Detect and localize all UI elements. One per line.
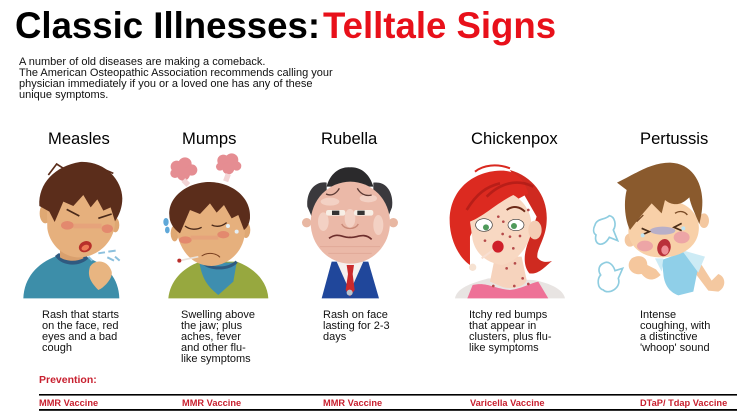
symptom text: mumps: Swelling above bbox=[181, 309, 255, 321]
title bbox=[15, 5, 556, 46]
symptom text: chickenpox: clusters, plus flu- bbox=[469, 331, 552, 343]
intro text block: The American Osteopathic Association recommends calling your bbox=[19, 67, 333, 79]
symptom text: rubella: days bbox=[323, 331, 347, 343]
vaccine labels: MMR Vaccine bbox=[39, 398, 98, 408]
symptom text: mumps: aches, fever bbox=[181, 331, 241, 343]
prevention label: Prevention: bbox=[39, 374, 97, 386]
icon: red-haired woman with spots bbox=[450, 165, 565, 298]
symptom text: mumps: and other flu- bbox=[181, 342, 246, 354]
heading: mumps: Mumps bbox=[182, 129, 236, 148]
heading: measles: Measles bbox=[48, 129, 110, 148]
icon: boy coughing with puffs bbox=[594, 163, 724, 295]
symptom text: measles: Rash that starts bbox=[42, 309, 120, 321]
symptom text: rubella: lasting for 2-3 bbox=[323, 320, 390, 332]
symptom text: pertussis: a distinctive bbox=[640, 331, 697, 343]
intro text block: A number of old diseases are making a comeback. bbox=[19, 56, 265, 68]
symptom text: mumps bbox=[181, 309, 255, 365]
icon: feverish boy with thermometer bbox=[163, 153, 268, 298]
intro text block bbox=[19, 56, 333, 101]
panel: pertussis bbox=[594, 129, 724, 354]
symptom text: pertussis: Intense bbox=[640, 309, 676, 321]
symptom text: chickenpox bbox=[469, 309, 552, 354]
symptom text: measles bbox=[42, 309, 120, 354]
symptom text: chickenpox: like symptoms bbox=[469, 342, 539, 354]
symptom text: pertussis: 'whoop' sound bbox=[640, 342, 710, 354]
panel: mumps bbox=[163, 129, 268, 365]
symptom text: rubella: Rash on face bbox=[323, 309, 388, 321]
symptom text: chickenpox: Itchy red bumps bbox=[469, 309, 548, 321]
heading: chickenpox: Chickenpox bbox=[471, 129, 558, 148]
icon: man with facial rash bbox=[302, 167, 398, 298]
symptom text: pertussis bbox=[640, 309, 710, 354]
prevention section bbox=[39, 374, 737, 411]
vaccine labels bbox=[39, 398, 727, 408]
panel: chickenpox bbox=[450, 129, 565, 354]
title: Classic Illnesses: bbox=[15, 5, 320, 46]
intro text block: unique symptoms. bbox=[19, 89, 108, 101]
symptom text: mumps: the jaw; plus bbox=[181, 320, 243, 332]
symptom text: mumps: like symptoms bbox=[181, 353, 251, 365]
vaccine labels: MMR Vaccine bbox=[182, 398, 241, 408]
panel: measles bbox=[23, 129, 122, 354]
symptom text: measles: on the face, red bbox=[42, 320, 118, 332]
symptom text: measles: cough bbox=[42, 342, 72, 354]
intro text block: physician immediately if you or a loved one has any of these bbox=[19, 78, 312, 90]
vaccine labels: MMR Vaccine bbox=[323, 398, 382, 408]
heading: pertussis: Pertussis bbox=[640, 129, 708, 148]
symptom text: measles: eyes and a bad bbox=[42, 331, 117, 343]
vaccine labels: DTaP/ Tdap Vaccine bbox=[640, 398, 727, 408]
symptom text: pertussis: coughing, with bbox=[640, 320, 710, 332]
panel: rubella bbox=[302, 129, 398, 343]
title: Telltale Signs bbox=[323, 5, 556, 46]
vaccine labels: Varicella Vaccine bbox=[470, 398, 545, 408]
symptom text: rubella bbox=[323, 309, 390, 343]
icon: coughing boy with measles bbox=[23, 162, 122, 298]
heading: rubella: Rubella bbox=[321, 129, 378, 148]
symptom text: chickenpox: that appear in bbox=[469, 320, 536, 332]
